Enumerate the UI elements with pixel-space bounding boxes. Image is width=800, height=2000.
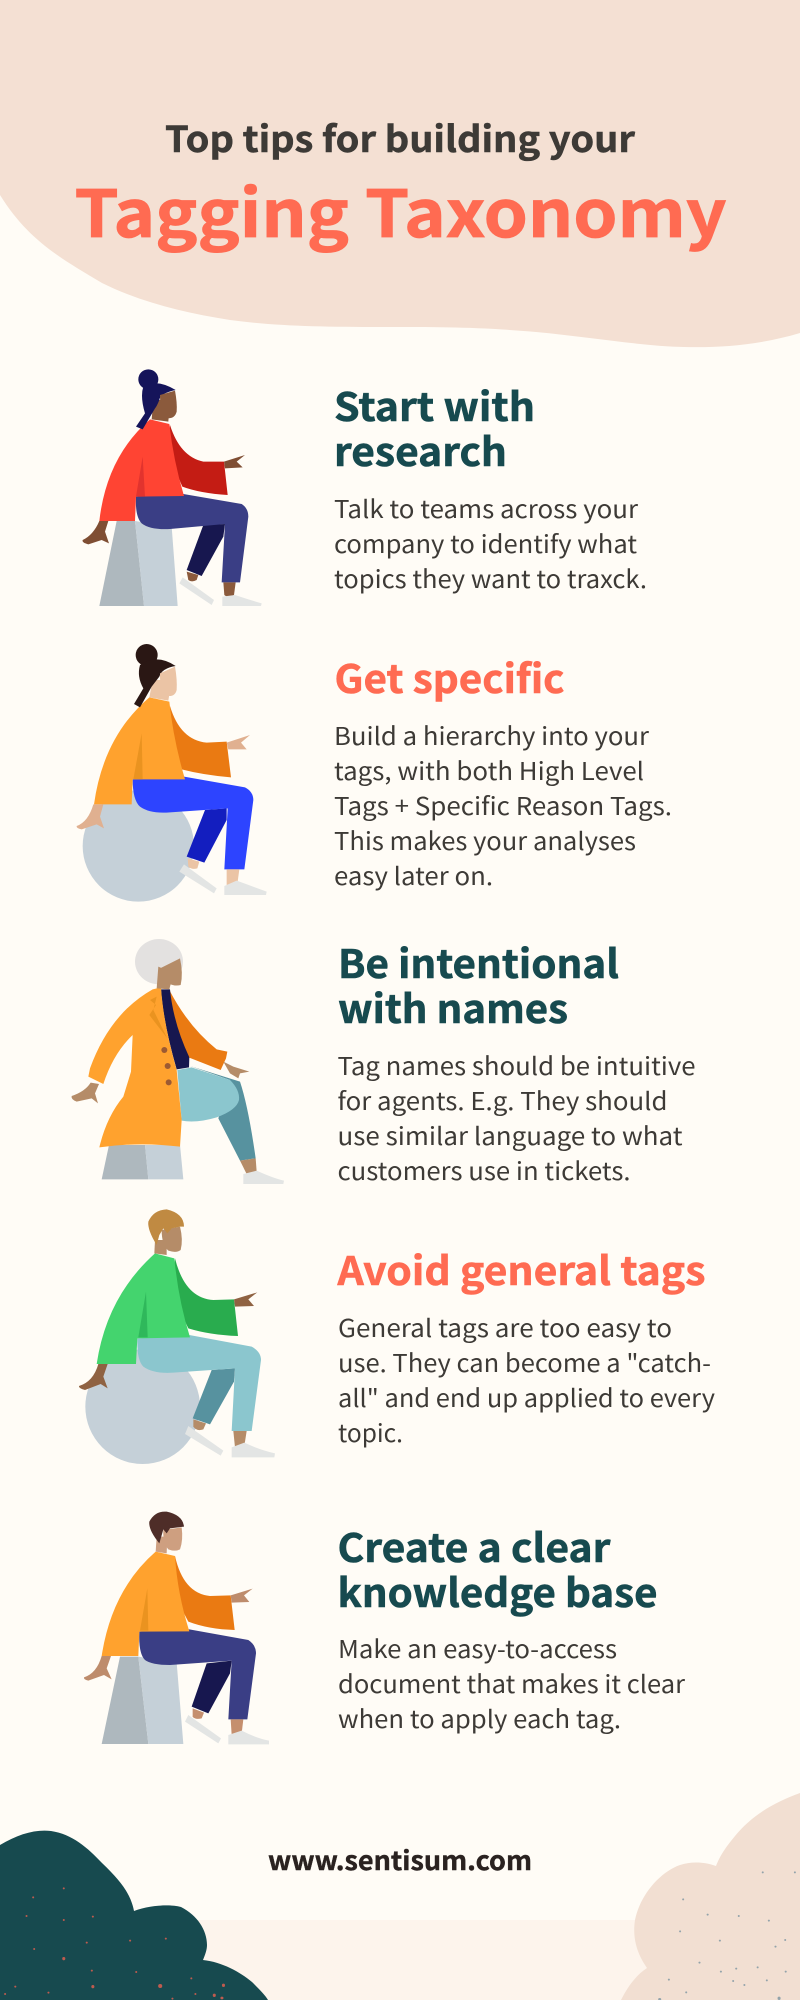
figure: woman in red on a stone — [83, 369, 262, 606]
heading: knowledge base — [338, 1563, 658, 1619]
body text: topics they want to traxck. — [334, 561, 647, 596]
peach bush — [621, 1793, 800, 2000]
body text: General tags are too easy to — [338, 1310, 672, 1345]
heading: Avoid general tags — [336, 1241, 706, 1297]
body text: use similar language to what — [338, 1118, 682, 1153]
body text: Make an easy-to-access — [338, 1631, 617, 1666]
body text: Tags + Specific Reason Tags. — [334, 788, 672, 823]
figure: older woman in orange coat — [72, 939, 284, 1184]
body text — [338, 1048, 696, 1188]
heading — [338, 1518, 658, 1619]
panel: create a clear knowledge base — [84, 1512, 686, 1744]
dark green bush — [0, 1831, 268, 2000]
panel: start with research — [83, 369, 647, 606]
body text — [338, 1310, 715, 1450]
body text: use. They can become a "catch- — [338, 1345, 711, 1380]
heading — [334, 377, 535, 478]
body text: all" and end up applied to every — [338, 1380, 715, 1415]
website footer: www.sentisum.com — [268, 1841, 532, 1878]
heading: research — [334, 422, 507, 478]
heading — [338, 934, 619, 1035]
body text: document that makes it clear — [338, 1666, 686, 1701]
body text — [334, 718, 672, 893]
body text: for agents. E.g. They should — [338, 1083, 668, 1118]
figure: man in orange on a stone — [84, 1512, 269, 1744]
title line 1: Top tips for building your — [165, 111, 635, 163]
body text: This makes your analyses — [334, 823, 636, 858]
panel: be intentional with names — [72, 934, 696, 1188]
heading: Be intentional — [338, 934, 619, 990]
panel: avoid general tags — [79, 1209, 715, 1464]
figure: woman in orange on a ball — [77, 644, 267, 902]
heading: with names — [338, 979, 568, 1035]
body text: company to identify what — [334, 526, 637, 561]
body text: tags, with both High Level — [334, 753, 644, 788]
body text: customers use in tickets. — [338, 1153, 630, 1188]
heading: Get specific — [334, 649, 564, 705]
panel: get specific — [77, 644, 672, 902]
heading: Start with — [334, 377, 535, 433]
title line 2: Tagging Taxonomy — [74, 162, 726, 256]
header blob — [0, 0, 800, 347]
body text: Tag names should be intuitive — [338, 1048, 696, 1083]
body text: when to apply each tag. — [338, 1701, 621, 1736]
heading: Create a clear — [338, 1518, 612, 1574]
body text: Build a hierarchy into your — [334, 718, 650, 753]
body text: easy later on. — [334, 858, 493, 893]
body text: Talk to teams across your — [334, 491, 639, 526]
body text — [338, 1631, 686, 1736]
body text — [334, 491, 647, 596]
body text: topic. — [338, 1415, 403, 1450]
figure: man in green on a ball — [79, 1209, 275, 1464]
title — [74, 111, 726, 256]
